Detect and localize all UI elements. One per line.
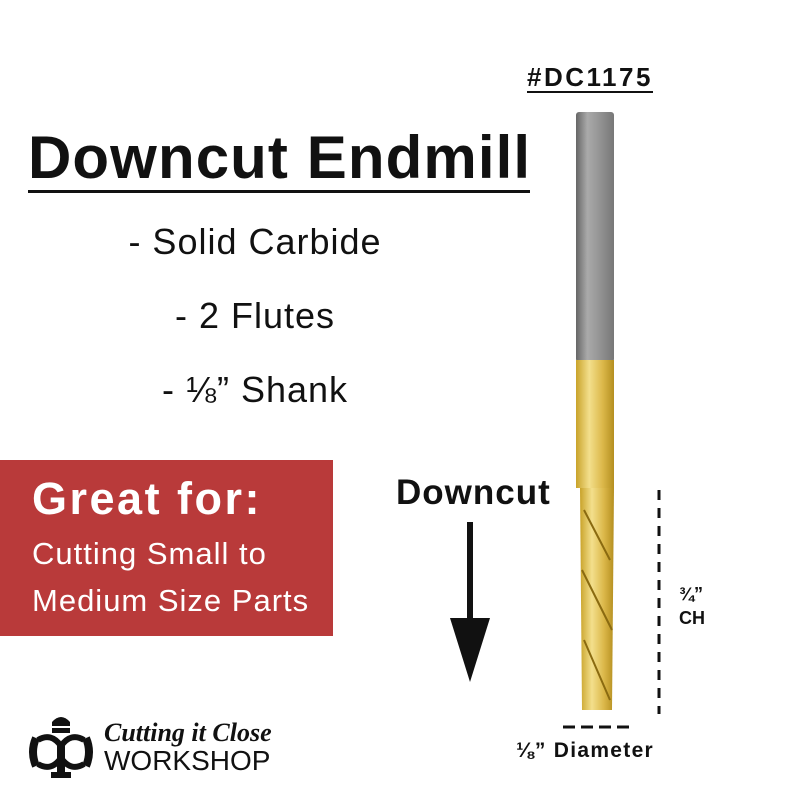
icon: logo mark	[29, 717, 93, 778]
title: Downcut Endmill	[28, 124, 531, 191]
label: 3/4 CH: ¾”	[679, 584, 703, 604]
callout heading: Great for:	[32, 473, 262, 524]
part number: #DC1175	[527, 62, 653, 92]
feature list: - 2 Flutes	[175, 295, 335, 336]
callout: great for	[0, 460, 333, 636]
logo: WORKSHOP	[104, 745, 270, 776]
dimension: cutting height	[658, 490, 660, 714]
endmill bit	[576, 112, 614, 710]
callout text	[32, 536, 309, 618]
feature list	[128, 221, 382, 410]
arrow: down	[450, 522, 490, 682]
callout text: Medium Size Parts	[32, 583, 309, 618]
callout text: Cutting Small to	[32, 536, 267, 571]
dimension: diameter	[563, 726, 629, 728]
downcut label: Downcut	[396, 473, 551, 512]
logo text: Cutting it Close	[104, 718, 272, 747]
label: 3/4 CH: CH	[679, 608, 705, 628]
feature list: - Solid Carbide	[128, 221, 382, 262]
label: 3/4 CH	[679, 584, 705, 628]
label: diameter: ⅛” Diameter	[516, 739, 654, 762]
feature list: - ⅛” Shank	[162, 369, 348, 410]
logo	[29, 717, 272, 778]
